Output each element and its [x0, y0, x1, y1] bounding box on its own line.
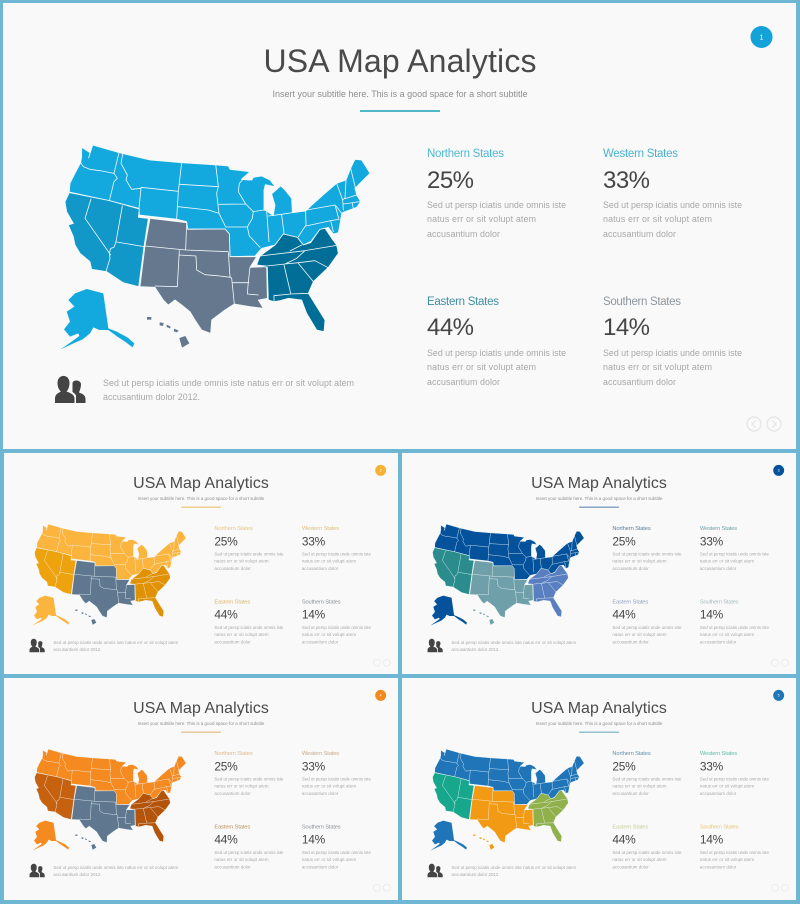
yellow slide title: USA Map Analytics	[133, 475, 269, 492]
page badge	[750, 26, 772, 48]
orange slide badge: 4	[380, 694, 382, 698]
yellow stat: Eastern States: 44%	[214, 607, 238, 621]
yellow slide badge: 2	[380, 469, 382, 473]
stat: Eastern States: 44%	[427, 314, 474, 341]
yellow stat: Eastern States: accusantium dolor	[214, 639, 251, 644]
multicolour stat: Western States: Sed ut persp iciatis unde omnis iste	[700, 776, 770, 781]
title: USA Map Analytics	[264, 43, 536, 79]
multicolour slide icon: people	[428, 864, 443, 877]
multicolour stat: Eastern States: 44%	[612, 832, 636, 846]
multicolour stat: Northern States	[612, 751, 682, 796]
panel: yellow slide	[30, 465, 390, 666]
yellow stat: Northern States: 25%	[214, 534, 238, 548]
stat: Southern States	[603, 296, 742, 387]
page badge: 1	[760, 34, 764, 42]
navy stat: Northern States: 25%	[612, 534, 636, 548]
orange slide footnote: Sed ut persp iciatis unde omnis iste natus err or sit volupt atem	[53, 865, 178, 870]
title underline	[360, 110, 440, 112]
navy slide badge: 3	[778, 469, 780, 473]
navy slide subtitle: Insert your subtitle here. This is a good space for a short subtitle	[536, 496, 663, 501]
multicolour slide subtitle: Insert your subtitle here. This is a good space for a short subtitle	[536, 721, 663, 726]
multicolour stat: Eastern States: Sed ut persp iciatis unde omnis iste	[612, 850, 682, 855]
yellow slide footnote: accusantium dolor 2012.	[53, 647, 102, 652]
orange stat: Eastern States: Eastern States	[214, 825, 250, 831]
yellow stat: Western States: 33%	[302, 534, 326, 548]
navigation arrows	[747, 417, 781, 431]
yellow stat: Western States: natus err or sit volupt atem	[302, 558, 356, 563]
orange slide footnote: accusantium dolor 2012.	[53, 872, 102, 877]
navy stat: Eastern States: accusantium dolor	[612, 639, 649, 644]
yellow stat: Northern States: accusantium dolor	[214, 566, 251, 571]
orange stat: Western States: accusantium dolor	[302, 791, 339, 796]
navy stat: Western States: 33%	[700, 534, 724, 548]
stat: Western States: Sed ut persp iciatis unde omnis iste	[603, 200, 742, 210]
navy stat: Eastern States: Sed ut persp iciatis unde omnis iste	[612, 625, 682, 630]
orange stat: Northern States: Northern States	[214, 751, 253, 757]
navy slide footnote: accusantium dolor 2012.	[451, 647, 500, 652]
navy stat: Western States: Sed ut persp iciatis unde omnis iste	[700, 551, 770, 556]
multicolour stat: Southern States: accusantium dolor	[700, 864, 737, 869]
yellow stat: Southern States: Southern States	[302, 600, 341, 606]
yellow stat: Eastern States: Sed ut persp iciatis unde omnis iste	[214, 625, 284, 630]
orange stat: Southern States: accusantium dolor	[302, 864, 339, 869]
navy slide badge	[773, 465, 784, 476]
navy slide navigation arrows	[771, 659, 788, 666]
yellow slide subtitle: Insert your subtitle here. This is a good space for a short subtitle	[138, 496, 265, 501]
orange stat: Eastern States: natus err or sit volupt atem	[214, 857, 269, 862]
stat: Western States: 33%	[603, 167, 650, 194]
orange stat: Western States: Sed ut persp iciatis unde omnis iste	[302, 776, 372, 781]
orange stat: Southern States: Southern States	[302, 825, 341, 831]
navy stat: Southern States: natus err or sit volupt atem	[700, 632, 754, 637]
panel: orange slide background	[4, 678, 398, 900]
stat: Western States: natus err or sit volupt atem	[603, 214, 712, 224]
yellow stat: Eastern States	[214, 600, 284, 644]
panel: multicolour slide	[428, 690, 788, 891]
yellow slide map	[32, 524, 186, 626]
multicolour slide footnote	[451, 865, 576, 877]
stat: Eastern States: Sed ut persp iciatis unde omnis iste	[427, 348, 566, 358]
footnote text	[103, 378, 354, 402]
orange stat: Southern States	[302, 825, 372, 869]
multicolour slide map	[430, 749, 584, 851]
multicolour slide badge	[773, 690, 784, 701]
yellow stat: Western States: accusantium dolor	[302, 566, 339, 571]
orange stat: Northern States: 25%	[214, 759, 238, 773]
yellow stat: Northern States: natus err or sit volupt atem	[214, 558, 269, 563]
multicolour stat: Northern States: 25%	[612, 759, 636, 773]
orange slide title: USA Map Analytics	[133, 700, 269, 717]
navy stat: Western States: accusantium dolor	[700, 566, 737, 571]
navy stat: Northern States: Sed ut persp iciatis unde omnis iste	[612, 551, 682, 556]
orange stat: Northern States: natus err or sit volupt atem	[214, 783, 269, 788]
yellow stat: Western States: Sed ut persp iciatis unde omnis iste	[302, 551, 372, 556]
stat: Northern States: 25%	[427, 167, 474, 194]
navy stat: Western States: Western States	[700, 526, 737, 532]
navy stat: Northern States: natus err or sit volupt atem	[612, 558, 667, 563]
multicolour slide title: USA Map Analytics	[531, 700, 667, 717]
navy stat: Southern States: Sed ut persp iciatis unde omnis iste	[700, 625, 770, 630]
navy stat: Western States: natus err or sit volupt atem	[700, 558, 754, 563]
multicolour stat: Southern States: Southern States	[700, 825, 739, 831]
orange slide footnote	[53, 865, 178, 877]
orange stat: Southern States: natus err or sit volupt atem	[302, 857, 356, 862]
navy slide title: USA Map Analytics	[531, 475, 667, 492]
multicolour stat: Western States: Western States	[700, 751, 737, 757]
panel: navy slide	[428, 465, 788, 666]
navy slide map	[430, 524, 584, 626]
navy stat: Western States	[700, 526, 770, 571]
orange stat: Western States	[302, 751, 372, 796]
stat: Eastern States: accusantium dolor	[427, 377, 500, 387]
yellow slide badge	[375, 465, 386, 476]
yellow stat: Eastern States: natus err or sit volupt atem	[214, 632, 269, 637]
navy stat: Northern States	[612, 526, 682, 571]
orange slide map	[32, 749, 186, 851]
icon: people	[55, 376, 86, 403]
yellow slide icon: people	[30, 639, 45, 652]
yellow stat: Southern States: 14%	[302, 607, 326, 621]
stat: Southern States: Sed ut persp iciatis unde omnis iste	[603, 348, 742, 358]
stat: Western States: accusantium dolor	[603, 229, 676, 239]
orange stat: Western States: Western States	[302, 751, 339, 757]
multicolour stat: Eastern States: Eastern States	[612, 825, 648, 831]
subtitle: Insert your subtitle here. This is a good space for a short subtitle	[272, 89, 528, 99]
stat: Northern States: Northern States	[427, 148, 504, 160]
yellow stat: Northern States	[214, 526, 284, 571]
navy stat: Southern States: accusantium dolor	[700, 639, 737, 644]
multicolour slide badge: 5	[778, 694, 780, 698]
yellow stat: Western States	[302, 526, 372, 571]
navy slide footnote: Sed ut persp iciatis unde omnis iste natus err or sit volupt atem	[451, 640, 576, 645]
map of USA	[61, 145, 370, 349]
multicolour slide footnote: Sed ut persp iciatis unde omnis iste natus err or sit volupt atem	[451, 865, 576, 870]
navy stat: Southern States: Southern States	[700, 600, 739, 606]
orange slide badge	[375, 690, 386, 701]
footnote text: Sed ut persp iciatis unde omnis iste natus err or sit volupt atem	[103, 378, 354, 388]
multicolour slide footnote: accusantium dolor 2012.	[451, 872, 500, 877]
multicolour stat: Western States: 33%	[700, 759, 724, 773]
orange stat: Northern States: Sed ut persp iciatis unde omnis iste	[214, 776, 284, 781]
stat: Western States	[603, 148, 742, 239]
yellow stat: Eastern States: Eastern States	[214, 600, 250, 606]
multicolour stat: Southern States: Sed ut persp iciatis unde omnis iste	[700, 850, 770, 855]
orange slide icon: people	[30, 864, 45, 877]
orange stat: Eastern States	[214, 825, 284, 869]
navy slide icon: people	[428, 639, 443, 652]
panel background	[3, 3, 796, 449]
stat: Northern States: Sed ut persp iciatis unde omnis iste	[427, 200, 566, 210]
orange slide subtitle: Insert your subtitle here. This is a good space for a short subtitle	[138, 721, 265, 726]
multicolour stat: Eastern States: accusantium dolor	[612, 864, 649, 869]
footnote text: accusantium dolor 2012.	[103, 392, 200, 402]
yellow stat: Southern States	[302, 600, 372, 644]
stat: Northern States: natus err or sit volupt atem	[427, 214, 536, 224]
panel: large blue slide	[3, 3, 796, 449]
navy stat: Eastern States: Eastern States	[612, 600, 648, 606]
stat: Southern States: Southern States	[603, 296, 681, 308]
yellow stat: Northern States: Northern States	[214, 526, 253, 532]
orange stat: Western States: natus err or sit volupt atem	[302, 783, 356, 788]
multicolour stat: Southern States	[700, 825, 770, 869]
yellow stat: Northern States: Sed ut persp iciatis unde omnis iste	[214, 551, 284, 556]
orange slide navigation arrows	[373, 884, 390, 891]
orange stat: Eastern States: Sed ut persp iciatis unde omnis iste	[214, 850, 284, 855]
stat: Northern States	[427, 148, 566, 239]
orange stat: Southern States: 14%	[302, 832, 326, 846]
multicolour stat: Eastern States: natus err or sit volupt atem	[612, 857, 667, 862]
stat: Eastern States: Eastern States	[427, 296, 499, 308]
stat: Northern States: accusantium dolor	[427, 229, 500, 239]
navy stat: Northern States: accusantium dolor	[612, 566, 649, 571]
yellow stat: Southern States: Sed ut persp iciatis unde omnis iste	[302, 625, 372, 630]
stat: Southern States: accusantium dolor	[603, 377, 676, 387]
stat: Southern States: 14%	[603, 314, 650, 341]
yellow stat: Southern States: natus err or sit volupt atem	[302, 632, 356, 637]
orange stat: Eastern States: accusantium dolor	[214, 864, 251, 869]
multicolour slide navigation arrows	[771, 884, 788, 891]
yellow stat: Western States: Western States	[302, 526, 339, 532]
stat: Western States: Western States	[603, 148, 678, 160]
panel: multicolour slide background	[402, 678, 796, 900]
multicolour stat: Western States: accusantium dolor	[700, 791, 737, 796]
panel: orange slide	[30, 690, 390, 891]
orange stat: Western States: 33%	[302, 759, 326, 773]
multicolour stat: Northern States: Sed ut persp iciatis unde omnis iste	[612, 776, 682, 781]
stat: Eastern States	[427, 296, 566, 387]
orange stat: Northern States: accusantium dolor	[214, 791, 251, 796]
multicolour stat: Western States: natus err or sit volupt atem	[700, 783, 754, 788]
multicolour stat: Western States	[700, 751, 770, 796]
stat: Southern States: natus err or sit volupt atem	[603, 362, 712, 372]
multicolour stat: Southern States: 14%	[700, 832, 724, 846]
orange stat: Southern States: Sed ut persp iciatis unde omnis iste	[302, 850, 372, 855]
yellow slide footnote: Sed ut persp iciatis unde omnis iste natus err or sit volupt atem	[53, 640, 178, 645]
navy stat: Northern States: Northern States	[612, 526, 651, 532]
multicolour stat: Northern States: accusantium dolor	[612, 791, 649, 796]
navy slide footnote	[451, 640, 576, 652]
navy stat: Eastern States: natus err or sit volupt atem	[612, 632, 667, 637]
stat: Eastern States: natus err or sit volupt atem	[427, 362, 536, 372]
orange stat: Eastern States: 44%	[214, 832, 238, 846]
multicolour stat: Northern States: Northern States	[612, 751, 651, 757]
navy stat: Southern States: 14%	[700, 607, 724, 621]
navy stat: Eastern States	[612, 600, 682, 644]
yellow slide navigation arrows	[373, 659, 390, 666]
multicolour stat: Southern States: natus err or sit volupt atem	[700, 857, 754, 862]
orange stat: Northern States	[214, 751, 284, 796]
multicolour stat: Northern States: natus err or sit volupt atem	[612, 783, 667, 788]
panel: yellow slide background	[4, 453, 398, 674]
panel: navy slide background	[402, 453, 796, 674]
multicolour stat: Eastern States	[612, 825, 682, 869]
yellow slide footnote	[53, 640, 178, 652]
navy stat: Southern States	[700, 600, 770, 644]
yellow stat: Southern States: accusantium dolor	[302, 639, 339, 644]
navy stat: Eastern States: 44%	[612, 607, 636, 621]
